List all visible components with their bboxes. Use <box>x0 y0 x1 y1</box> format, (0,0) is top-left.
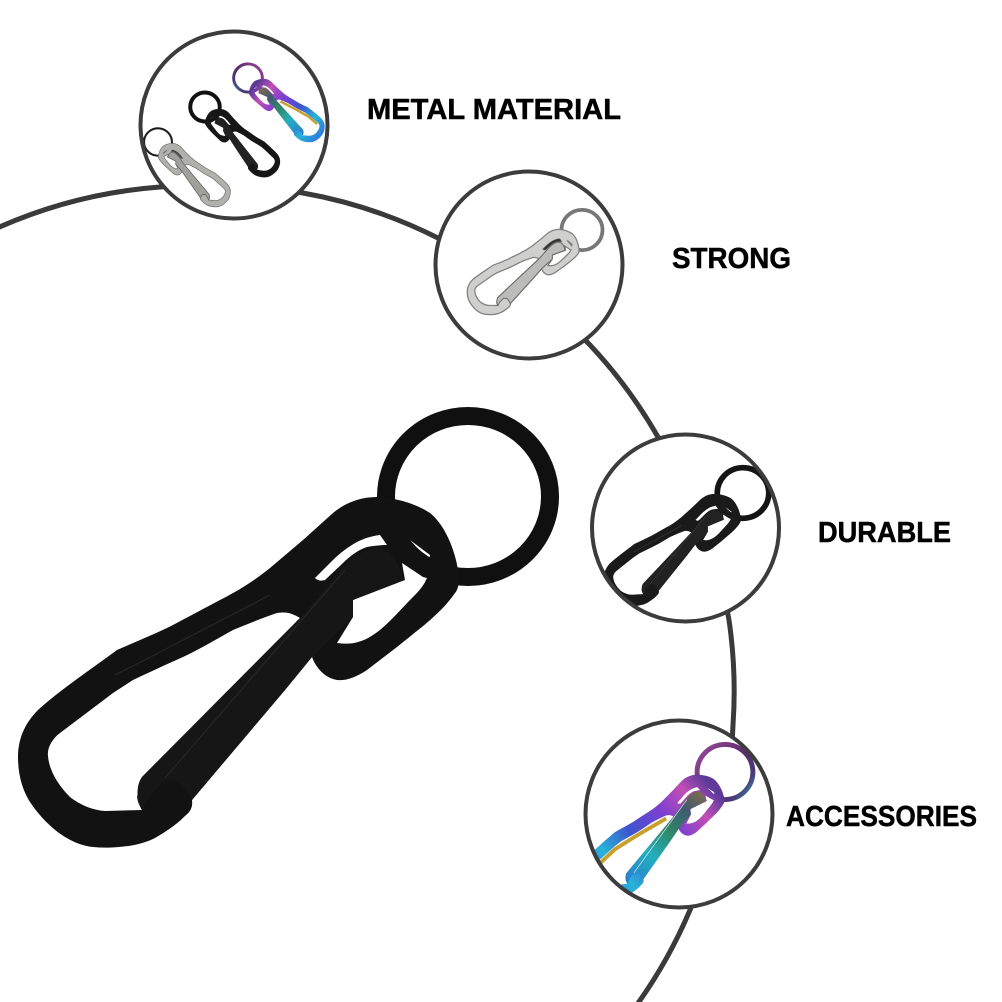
circle outline: accessories <box>586 720 772 908</box>
main black carabiner keychain <box>18 416 550 848</box>
label: durable: DURABLE <box>818 517 951 549</box>
circle outline: durable <box>592 434 779 622</box>
circle: durable <box>605 440 772 611</box>
label: accessories: ACCESSORIES <box>786 801 977 833</box>
circle outline: metal material <box>140 32 328 218</box>
rainbow keychain <box>231 63 327 143</box>
circle outline: strong <box>436 172 622 358</box>
circle: metal material <box>144 62 325 208</box>
connecting curved line <box>0 184 734 1002</box>
silver keychain <box>467 206 603 318</box>
black keychain close-up <box>601 467 772 607</box>
silver keychain <box>139 127 235 208</box>
label: metal material: METAL MATERIAL <box>367 94 621 126</box>
label: strong: STRONG <box>672 243 791 275</box>
black keychain <box>188 90 280 178</box>
circle: accessories <box>594 738 756 905</box>
rainbow keychain close-up <box>594 742 756 893</box>
circle: strong <box>440 208 604 340</box>
